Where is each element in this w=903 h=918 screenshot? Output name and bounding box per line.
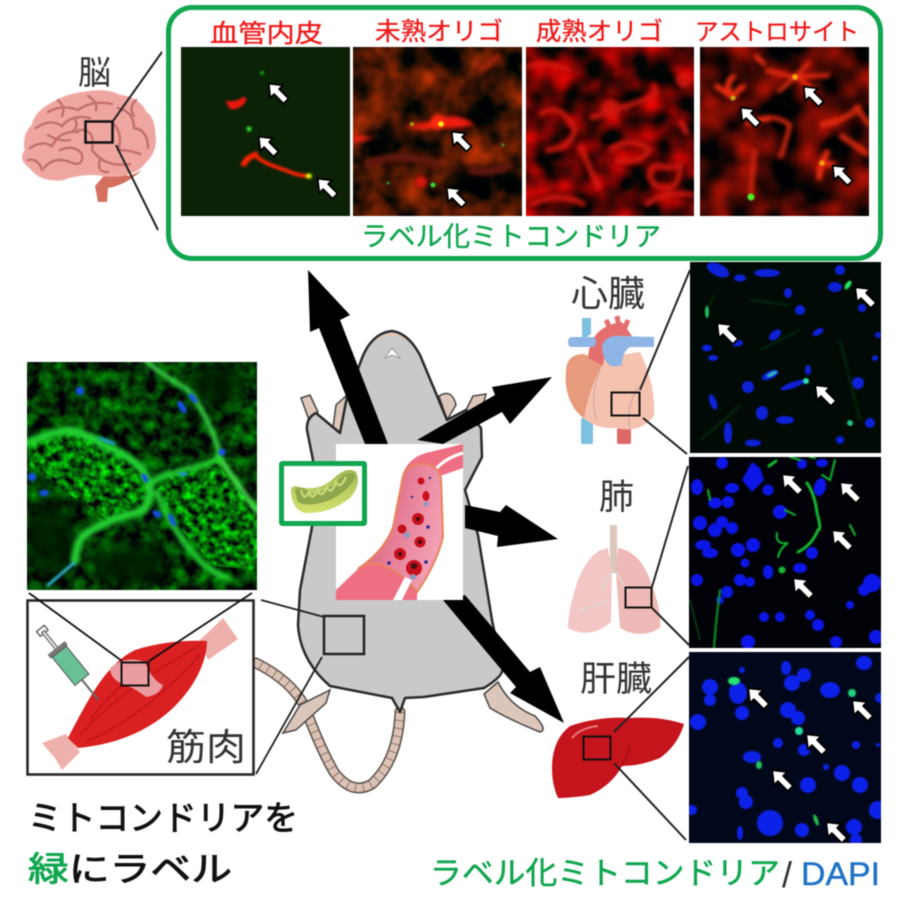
zoom lines: liver [614,657,689,840]
caption: labelled mitochondria / DAPI: ラベル化ミトコンドリア [430,856,780,891]
heading: astrocyte: アストロサイト [695,19,859,46]
heading: endothelium: 血管内皮 [210,20,323,48]
text: mitochondria labelled: ミトコンドリアを [28,800,298,838]
micrograph: lung [689,457,883,649]
highlight box on mouse [324,616,364,654]
illustration: blood vessel [336,444,463,600]
icon: lungs [568,525,660,634]
text: in green: 緑にラベル [28,851,232,889]
caption: labelled mitochondria / DAPI: / [782,854,792,895]
zoom lines: muscle [29,593,252,661]
panel: muscle box [28,593,254,774]
illustration: mouse [256,331,543,788]
label: muscle: 筋肉 [166,727,246,768]
mouse tail [256,663,400,788]
label: lung: 肺 [599,478,634,517]
micrograph: astrocyte [700,47,869,216]
caption: labelled mitochondria: ラベル化ミトコンドリア [361,222,661,252]
mouse body [298,331,502,712]
heading: mature oligodendrocyte: 成熟オリゴ [536,18,663,46]
arrow: to lung [465,505,558,547]
vessel lumen [358,464,443,592]
caption: labelled mitochondria / DAPI [430,854,880,895]
heading: immature oligodendrocyte: 未熟オリゴ [375,18,503,46]
mouse nose [385,348,400,358]
vessel cut stripe [393,577,412,600]
micrograph: muscle [22,362,257,590]
icon: heart [566,316,654,444]
zoom lines: heart [640,270,690,454]
icon: syringe [32,622,107,707]
mouse hands and feet [283,393,543,733]
caption: labelled mitochondria / DAPI: DAPI [801,856,880,892]
micrograph: mature oligodendrocyte [526,47,694,216]
arrow: to heart [417,377,552,444]
micrograph: endothelium [181,47,350,216]
micrograph: heart [690,259,881,453]
zoom lines: lung [652,466,689,645]
arrow: to brain [308,270,388,444]
label: heart: 心臓 [571,273,645,314]
label: brain: 脳 [78,54,111,91]
micrograph: immature oligodendrocyte [353,47,522,216]
micrograph: liver [687,652,887,847]
icon: brain [22,91,156,202]
zoom lines: brain [113,52,162,230]
vessel wall [336,444,463,600]
icon: mitochondrion [282,464,364,524]
zoom lines: mouse to muscle [256,600,324,774]
arrow: to liver [443,595,564,723]
icon: liver [552,718,684,798]
label: liver: 肝臓 [580,660,652,699]
icon: muscle [42,618,238,770]
panel: brain regions frame [168,8,880,258]
